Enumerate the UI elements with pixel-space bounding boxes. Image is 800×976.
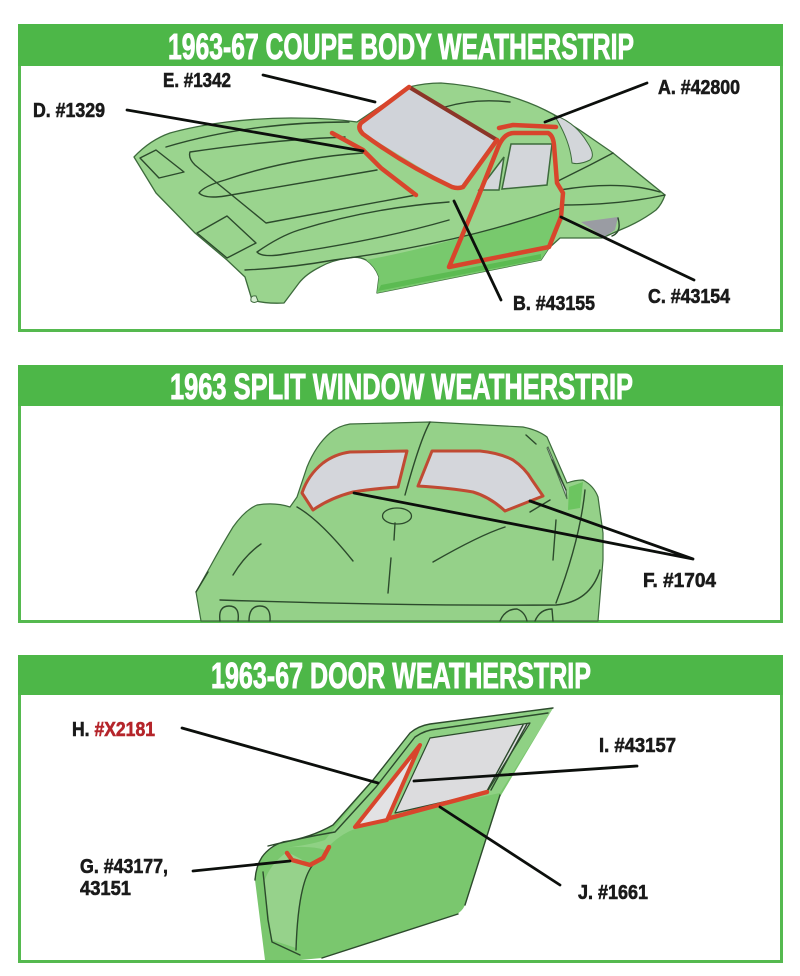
right rear window bbox=[418, 451, 543, 511]
left rear window bbox=[302, 451, 407, 510]
label: H: H. #X2181 bbox=[72, 719, 155, 741]
panel: split window weatherstrip bbox=[18, 365, 783, 622]
hood weatherstrip bbox=[332, 133, 416, 195]
leader lines: split window bbox=[354, 493, 693, 559]
illustration: coupe car body bbox=[134, 83, 665, 303]
door weatherstrip bbox=[449, 133, 563, 267]
heading: door: 1963-67 DOOR WEATHERSTRIP bbox=[211, 655, 591, 696]
roof rail weatherstrip bbox=[499, 125, 556, 128]
leader lines: coupe body bbox=[127, 75, 694, 300]
door glass bbox=[502, 144, 552, 189]
label: A: A. #42800 bbox=[658, 77, 740, 99]
label: B: B. #43155 bbox=[513, 293, 595, 315]
label: I: I. #43157 bbox=[599, 735, 676, 757]
panel: door weatherstrip bbox=[18, 655, 783, 962]
trunk badge oval bbox=[382, 508, 412, 524]
label: E: E. #1342 bbox=[163, 70, 231, 92]
label: G bbox=[80, 856, 168, 900]
illustration: door bbox=[255, 708, 553, 960]
label: C: C. #43154 bbox=[648, 286, 731, 308]
label: J: J. #1661 bbox=[578, 882, 648, 904]
windshield with weatherstrip bbox=[359, 87, 497, 188]
hood lines bbox=[140, 122, 449, 258]
panel: coupe body weatherstrip bbox=[18, 24, 783, 330]
label: G: 43151 bbox=[80, 878, 131, 900]
vent window with weatherstrip bbox=[355, 745, 420, 827]
panel frame bbox=[20, 656, 782, 962]
door glass bbox=[395, 723, 530, 813]
lower window weatherstrip bbox=[390, 792, 487, 818]
illustration: split window car rear bbox=[196, 422, 603, 621]
label: D: D. #1329 bbox=[33, 100, 105, 122]
tail lights bbox=[220, 606, 553, 621]
leader lines: door bbox=[182, 728, 637, 885]
panel frame bbox=[20, 366, 782, 622]
panel frame bbox=[20, 26, 782, 330]
rear window glass bbox=[554, 115, 592, 164]
label: G: G. #43177, bbox=[80, 856, 168, 878]
label: F: F. #1704 bbox=[643, 570, 717, 592]
door corner weatherstrip bbox=[287, 847, 329, 865]
